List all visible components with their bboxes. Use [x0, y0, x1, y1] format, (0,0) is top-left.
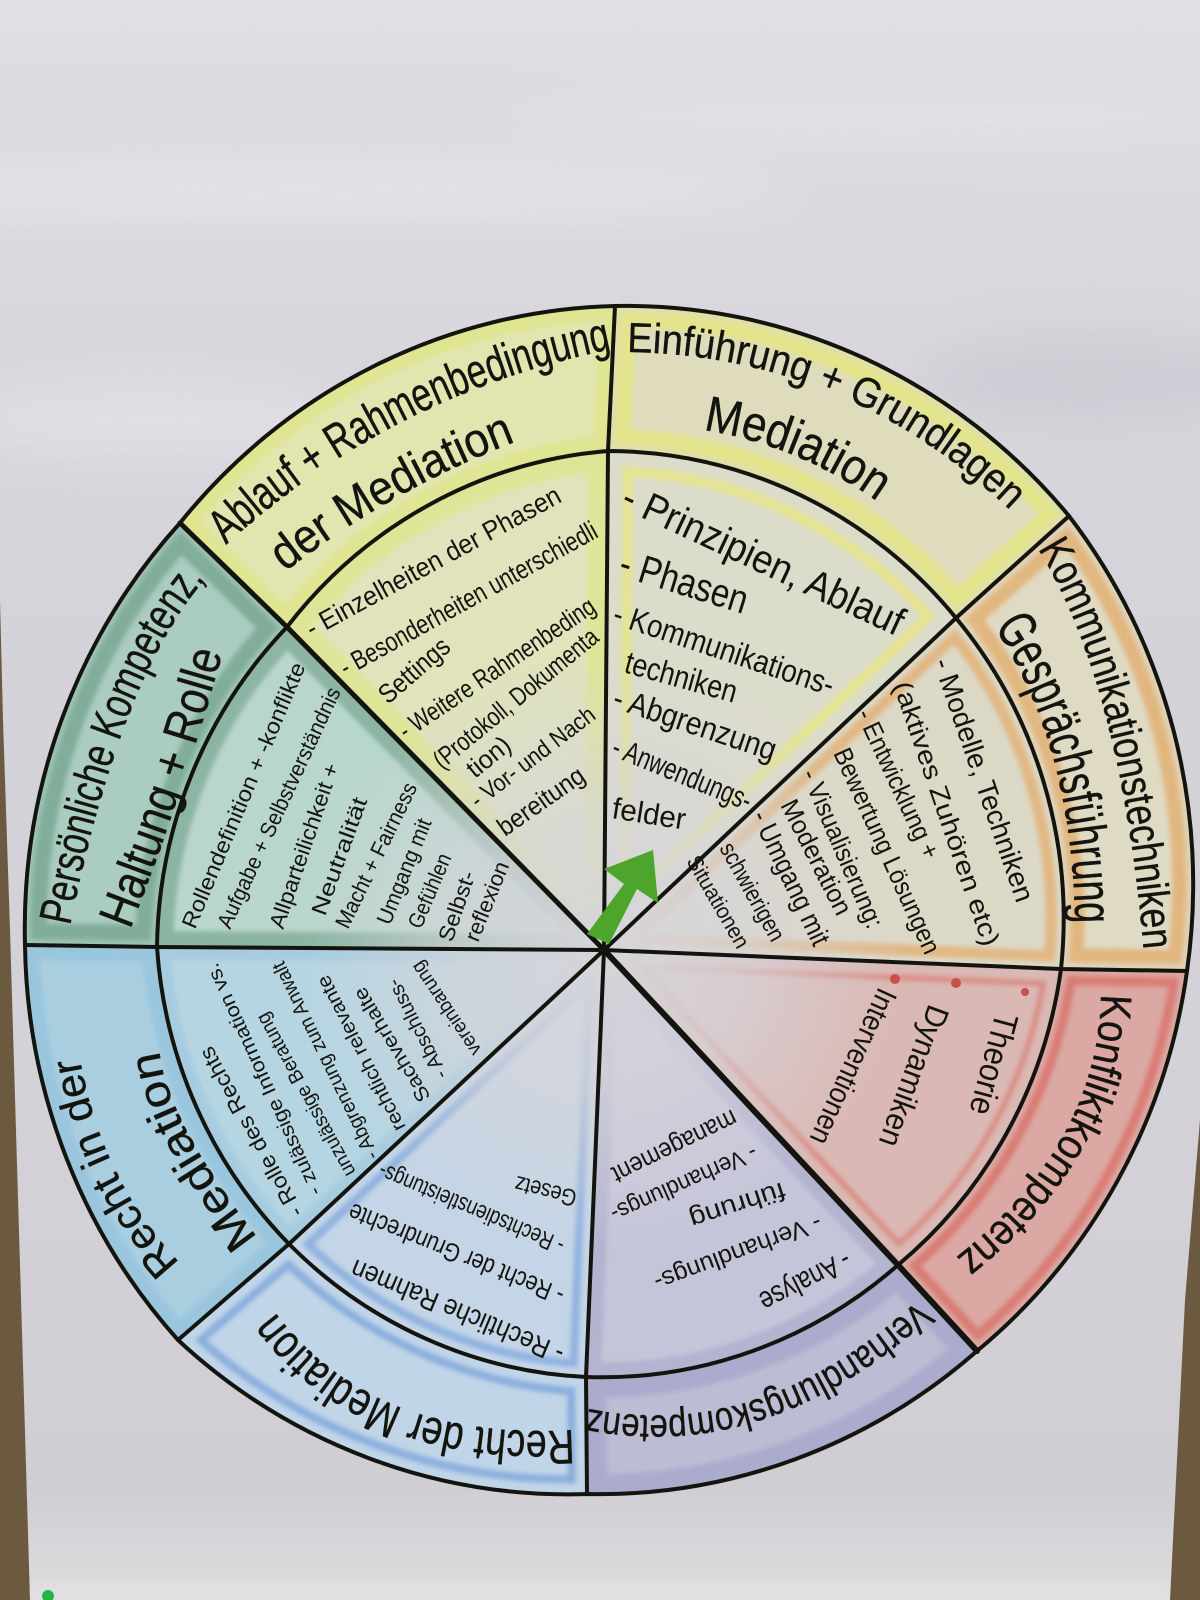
text block: Recht der Mediation wedge list: - Recht der Grundrechte [344, 1197, 568, 1311]
panel: Recht der Mediation, inner wedge [292, 1000, 594, 1375]
heading: Recht in der Mediation: Mediation [137, 1054, 256, 1253]
text block: Recht in der Mediation wedge list: vereinbarung [407, 957, 486, 1060]
text block: Kommunikation wedge list: - Umgang mit [746, 805, 836, 951]
text block: Konflikt wedge list: Theorie [961, 1009, 1025, 1119]
text block: Recht in der Mediation wedge list: - Rolle des Rechts [194, 1043, 308, 1222]
text block: Recht der Mediation wedge list: - Rechtsdienstleistungs- [374, 1157, 568, 1259]
panel: Recht der Mediation, outer ring [178, 1244, 587, 1494]
icon: green arrow pointing up and to the right from the hub [587, 850, 658, 944]
text block: Ablauf wedge list: Settings [372, 631, 456, 710]
panel: Recht in der Mediation, inner wedge [159, 949, 538, 1241]
text block: Kommunikation wedge list: - Visualisierung: [795, 765, 890, 933]
text block: Persönliche Kompetenz wedge list: Gefühlen [403, 849, 456, 932]
text block: Konflikt wedge list: Interventionen [803, 983, 903, 1150]
text block: Verhandlung wedge list: - Verhandlungs- [650, 1208, 826, 1297]
text block: Ablauf wedge list [301, 480, 605, 842]
panel: Kommunikationstechniken, outer ring [956, 516, 1193, 971]
heading: Kommunikationstechniken Gesprächsführung: Kommunikationstechniken [1039, 536, 1170, 948]
panel: Recht in der Mediation, outer ring [25, 945, 289, 1340]
heading: Einführung + Grundlagen Mediation: Mediation [706, 396, 888, 500]
text block: Verhandlung wedge list [606, 1104, 857, 1318]
text block: Einführung wedge list: - Prinzipien, Ablauf [615, 475, 912, 645]
text block: Recht der Mediation wedge list: Gesetz [512, 1170, 579, 1211]
text block: Einführung wedge list [607, 475, 912, 836]
text block: Recht in der Mediation wedge list: - Abgrenzung zum Anwalt [268, 957, 383, 1163]
heading: Konfliktkompetenz: Konfliktkompetenz [956, 997, 1132, 1275]
text block: Einführung wedge list: - Abgrenzung [609, 679, 781, 768]
panel: Kommunikationstechniken, inner wedge [646, 621, 1062, 967]
text block: Persönliche Kompetenz wedge list: Selbst- [433, 867, 480, 945]
heading: Recht der Mediation: Recht der Mediation [258, 1314, 572, 1465]
text block: Persönliche Kompetenz wedge list: Macht + Fairness [330, 778, 422, 932]
wheel outlines: rings and spokes [25, 306, 1193, 1494]
text block: Kommunikation wedge list: Moderation [775, 794, 859, 920]
panel: Persönliche Kompetenz, outer ring [25, 523, 287, 947]
text block: Verhandlung wedge list: führung [686, 1176, 789, 1235]
text block: Persönliche Kompetenz wedge list: Neutralität [306, 794, 372, 919]
panel: Konfliktkompetenz, inner wedge [650, 957, 1059, 1262]
heading: Kommunikationstechniken Gesprächsführung: Gesprächsführung [1000, 614, 1108, 922]
heading: Persönliche Kompetenz, Haltung + Rolle: Haltung + Rolle [99, 650, 221, 927]
heading: Verhandlungskompetenz: Verhandlungskompetenz [588, 1306, 936, 1442]
heading: Ablauf + Rahmenbedingung der Mediation: der Mediation [274, 420, 514, 568]
text block: Kommunikation wedge list: Situationen [682, 851, 755, 953]
text block: Ablauf wedge list: bereitung [491, 760, 590, 842]
panel: Einführung + Grundlagen Mediation, outer ring [608, 306, 1069, 618]
text block: Persönliche Kompetenz wedge list [177, 659, 514, 945]
text block: Recht in der Mediation wedge list: rechtlich relevante [313, 971, 410, 1135]
text block: Persönliche Kompetenz wedge list: Rollendefinition + -konflikte [177, 659, 310, 932]
panel: Persönliche Kompetenz, inner wedge [159, 630, 563, 948]
icon: green pin at the bottom left [42, 1590, 54, 1600]
text block: Ablauf wedge list: - Weitere Rahmenbeding [393, 591, 601, 745]
heading: Recht in der Mediation: Recht in der [58, 1062, 178, 1280]
panel: Ablauf + Rahmenbedingung, inner wedge [290, 453, 606, 904]
text block: Kommunikation wedge list [682, 654, 1040, 959]
panel: Verhandlungskompetenz, outer ring [586, 1265, 977, 1494]
text block: Persönliche Kompetenz wedge list: Umgang mit [371, 815, 437, 928]
text block: Konflikt wedge list [803, 983, 1025, 1152]
text block: Recht der Mediation wedge list [344, 1157, 579, 1370]
text block: Ablauf wedge list: (Protokoll, Dokumenta [427, 621, 605, 775]
panel: Einführung + Grundlagen Mediation, inner wedge [608, 453, 953, 897]
icon: red bullet points of the Konflikt wedge [890, 974, 1029, 996]
panel: Verhandlungskompetenz, inner wedge [588, 1044, 894, 1376]
text block: Einführung wedge list: - Kommunikations- [609, 595, 839, 703]
text block: Recht in der Mediation wedge list: unzulässige Beratung [252, 1009, 360, 1180]
text block: Recht in der Mediation wedge list: Sachverhalte [349, 983, 435, 1106]
heading: Recht in der Mediation [58, 1054, 256, 1280]
text block: Recht der Mediation wedge list: - Rechtliche Rahmen [346, 1253, 568, 1370]
heading: Einführung + Grundlagen Mediation: Einführung + Grundlagen [630, 322, 1022, 509]
text block: Verhandlung wedge list: - Verhandlungs- [606, 1139, 762, 1227]
text block: Recht in der Mediation wedge list: - Abschluss- [383, 975, 452, 1083]
text block: Einführung wedge list: techniken [621, 644, 742, 710]
panel: Ablauf + Rahmenbedingung, outer ring [180, 306, 615, 627]
text block: Persönliche Kompetenz wedge list: Allparteilichkeit + [264, 760, 344, 932]
text block: Kommunikation wedge list: Bewertung Lösungen [828, 743, 947, 959]
pale unpainted area around the hub [304, 650, 904, 1250]
text block: Verhandlung wedge list: - Analyse [754, 1244, 857, 1318]
text block: Kommunikation wedge list: - Modelle, Techniken [927, 654, 1040, 906]
text block: Ablauf wedge list: - Vor- und Nach [465, 701, 601, 814]
text block: Verhandlung wedge list: management [607, 1104, 743, 1190]
heading: Persönliche Kompetenz, Haltung + Rolle: Persönliche Kompetenz, [39, 573, 208, 924]
text block: Recht in der Mediation wedge list [194, 957, 486, 1222]
text block: Ablauf wedge list: - Einzelheiten der Phasen [301, 480, 566, 643]
text block: Persönliche Kompetenz wedge list: Aufgabe + Selbstverständnis [212, 683, 346, 932]
text block: Konflikt wedge list: Dynamiken [872, 1001, 956, 1152]
text block: Ablauf wedge list: tion) [460, 730, 517, 784]
text block: Einführung wedge list: felder [610, 792, 688, 836]
text block: Kommunikation wedge list: - Entwicklung + [851, 704, 946, 863]
panel: Konfliktkompetenz, outer ring [898, 969, 1187, 1351]
text block: Recht in der Mediation wedge list: - zulässige Information vs. [202, 960, 327, 1199]
text block: Ablauf wedge list: - Besonderheiten unterschiedli [334, 515, 603, 682]
text block: Einführung wedge list: - Anwendungs- [607, 731, 757, 817]
text block: Einführung wedge list: - Phasen [614, 542, 753, 623]
heading: Ablauf + Rahmenbedingung der Mediation: Ablauf + Rahmenbedingung [211, 324, 610, 546]
text block: Persönliche Kompetenz wedge list: reflexion [459, 858, 514, 945]
text block: Kommunikation wedge list: schwierigen [714, 838, 790, 946]
text block: Kommunikation wedge list: (aktives Zuhören etc) [887, 677, 1006, 950]
